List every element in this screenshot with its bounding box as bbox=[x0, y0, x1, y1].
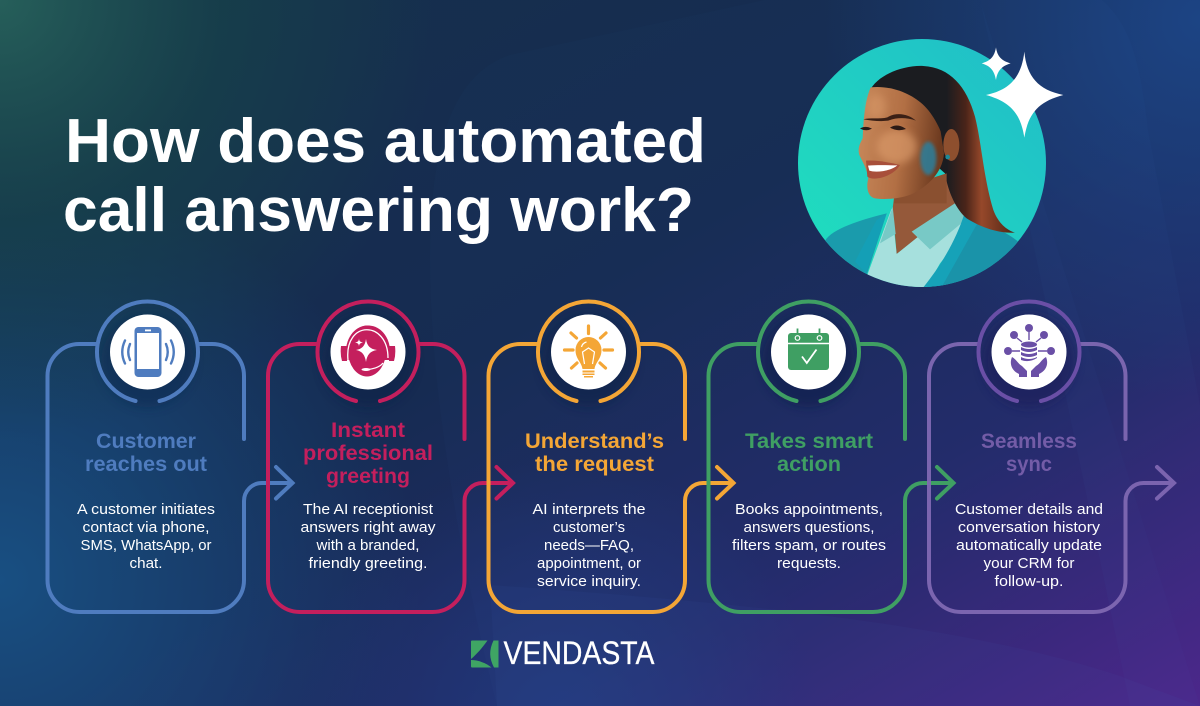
step 2 outline and arrow bbox=[268, 344, 513, 612]
step 2 description: with a branded, bbox=[315, 537, 420, 554]
step 2 description: The AI receptionist bbox=[303, 501, 434, 518]
step 3 badge with light bulb icon bbox=[538, 301, 639, 407]
step 5 heading: Seamless bbox=[981, 429, 1077, 453]
step 1 heading bbox=[85, 429, 207, 476]
step 5 description bbox=[955, 501, 1103, 590]
step 2 heading: professional bbox=[303, 441, 433, 465]
title bbox=[63, 107, 706, 245]
step 5 description: your CRM for bbox=[984, 555, 1074, 572]
step 1 heading: reaches out bbox=[85, 452, 207, 476]
step 4 badge with calendar icon bbox=[758, 301, 859, 407]
title: How does automated bbox=[65, 107, 706, 176]
step 5 outline and arrow bbox=[929, 344, 1174, 612]
step 3 description: needs—FAQ, bbox=[544, 537, 634, 554]
step 1 description: chat. bbox=[130, 555, 162, 572]
step 5 heading bbox=[981, 429, 1077, 476]
step 5 description: conversation history bbox=[958, 519, 1101, 536]
step 3 description: AI interprets the bbox=[532, 501, 646, 518]
step 4 description: filters spam, or routes bbox=[732, 537, 886, 554]
vendasta logo bbox=[471, 635, 655, 671]
step 2 heading: Instant bbox=[331, 418, 405, 442]
step 5 description: automatically update bbox=[956, 537, 1102, 554]
step 1 description: A customer initiates bbox=[77, 501, 215, 518]
logo wordmark: VENDASTA bbox=[504, 635, 655, 671]
step 4 description: requests. bbox=[777, 555, 841, 572]
step 4 description: Books appointments, bbox=[735, 501, 883, 518]
step 5: seamless sync bbox=[929, 301, 1174, 612]
step 2: instant professional greeting bbox=[268, 301, 513, 612]
step 4 heading: action bbox=[777, 452, 841, 476]
step 3 heading: Understand’s bbox=[525, 429, 664, 453]
step 4 outline and arrow bbox=[708, 344, 954, 612]
icon: sparkles bbox=[982, 47, 1063, 138]
step 3: understand's the request bbox=[488, 301, 734, 612]
portrait of smiling woman in teal circle bbox=[798, 39, 1046, 297]
step 3 heading bbox=[525, 429, 664, 476]
step 5 description: follow-up. bbox=[994, 573, 1064, 590]
step 2 badge with headset agent icon bbox=[318, 301, 418, 407]
logo mark bbox=[471, 640, 498, 668]
step 1 heading: Customer bbox=[96, 429, 197, 453]
step 4 heading bbox=[745, 429, 873, 476]
step 5 description: Customer details and bbox=[955, 501, 1103, 518]
step 3 description: service inquiry. bbox=[537, 573, 641, 590]
step 2 description: friendly greeting. bbox=[308, 555, 428, 572]
step 2 heading: greeting bbox=[326, 464, 410, 488]
step 5 badge with data sync icon bbox=[978, 301, 1080, 407]
title: call answering work? bbox=[63, 176, 694, 245]
step 1 description: SMS, WhatsApp, or bbox=[80, 537, 212, 554]
step 1 description: contact via phone, bbox=[82, 519, 210, 536]
step 1 badge with phone icon bbox=[97, 301, 198, 407]
step 3 outline and arrow bbox=[488, 344, 734, 612]
step 1 outline and arrow bbox=[47, 344, 292, 612]
step 2 heading bbox=[303, 418, 433, 488]
step 5 heading: sync bbox=[1006, 452, 1052, 476]
step 2 description bbox=[300, 501, 436, 572]
step 3 heading: the request bbox=[535, 452, 654, 476]
step 4 description bbox=[732, 501, 886, 572]
step 3 description: customer’s bbox=[553, 519, 625, 536]
step 4 heading: Takes smart bbox=[745, 429, 873, 453]
step 4: takes smart action bbox=[708, 301, 954, 612]
step 3 description: appointment, or bbox=[537, 555, 641, 572]
step 4 description: answers questions, bbox=[744, 519, 874, 536]
step 3 description bbox=[532, 501, 646, 590]
step 1: customer reaches out bbox=[47, 301, 292, 612]
step 2 description: answers right away bbox=[300, 519, 436, 536]
step 1 description bbox=[77, 501, 215, 572]
